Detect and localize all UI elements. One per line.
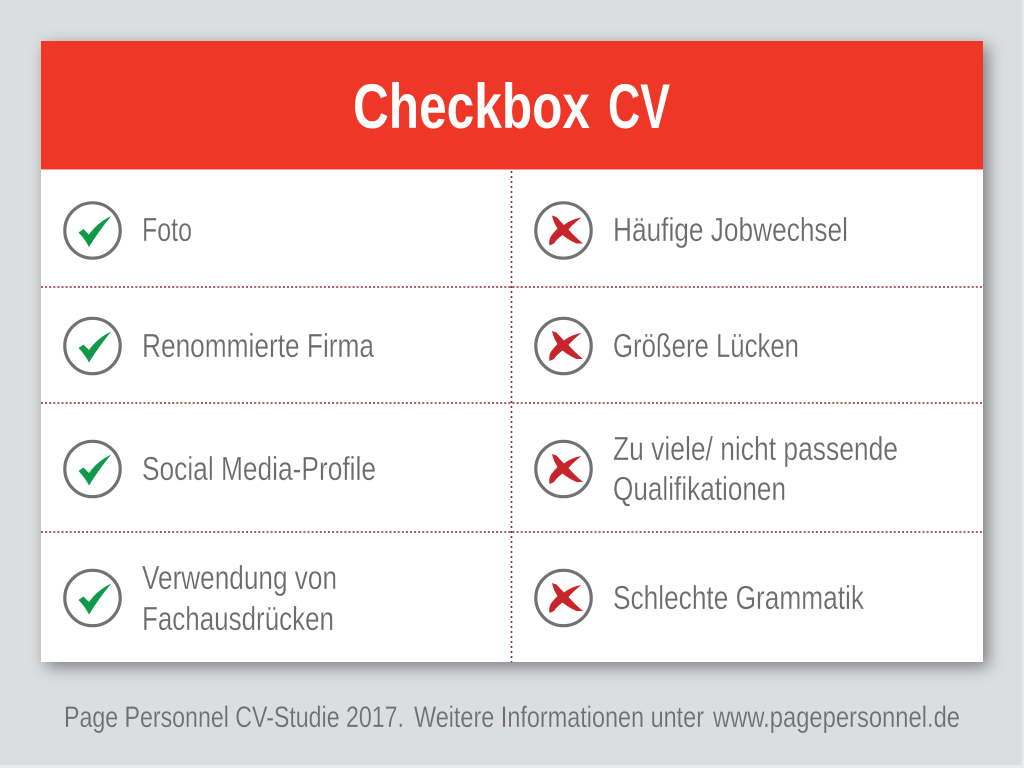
label: Foto: Foto: [142, 211, 192, 248]
label: Zu viele/ nicht passende Qualifikationen: [613, 430, 898, 507]
icon: check mark: [65, 203, 120, 258]
footer source note: Page Personnel CV-Studie 2017.: [64, 701, 404, 734]
footer source note: www.pagepersonnel.de: [712, 701, 960, 734]
panel: checklist card: [41, 41, 983, 662]
label: Größere Lücken: Größere Lücken: [613, 327, 799, 364]
icon: check mark: [65, 570, 120, 626]
label: Verwendung von Fachausdrücken: Verwendung von: [142, 559, 337, 596]
icon: red cross: [536, 441, 591, 497]
card shadow: [46, 46, 988, 667]
label: Zu viele/ nicht passende Qualifikationen: Zu viele/ nicht passende: [613, 430, 898, 467]
label: Zu viele/ nicht passende Qualifikationen: Qualifikationen: [613, 470, 786, 507]
row 3 left: Social Media-Profile: [65, 441, 376, 497]
title: CV: [608, 72, 670, 142]
label: Verwendung von Fachausdrücken: Fachausdrücken: [142, 600, 334, 637]
row 1 right: Häufige Jobwechsel: [536, 203, 848, 258]
label: Renommierte Firma: Renommierte Firma: [142, 327, 375, 364]
row 1 left: Foto: [65, 203, 192, 258]
label: Häufige Jobwechsel: Häufige Jobwechsel: [613, 211, 848, 248]
footer source note: Weitere Informationen unter: [414, 701, 704, 734]
icon: check mark: [65, 318, 120, 374]
label: Verwendung von Fachausdrücken: [142, 559, 337, 637]
row 2 right: Größere Lücken: [536, 318, 799, 374]
label: Schlechte Grammatik: Schlechte Grammatik: [613, 579, 864, 616]
label: Social Media-Profile: Social Media-Profile: [142, 450, 376, 487]
icon: check mark: [65, 441, 120, 497]
icon: red cross: [536, 203, 591, 258]
icon: red cross: [536, 570, 591, 626]
row 4 left: Verwendung von Fachausdrücken: [65, 559, 337, 637]
title banner: [41, 41, 983, 170]
title: Checkbox: [353, 72, 590, 142]
row 3 right: Zu viele/ nicht passende Qualifikationen: [536, 430, 898, 507]
row 4 right: Schlechte Grammatik: [536, 570, 864, 626]
row 2 left: Renommierte Firma: [65, 318, 375, 374]
icon: red cross: [536, 318, 591, 374]
